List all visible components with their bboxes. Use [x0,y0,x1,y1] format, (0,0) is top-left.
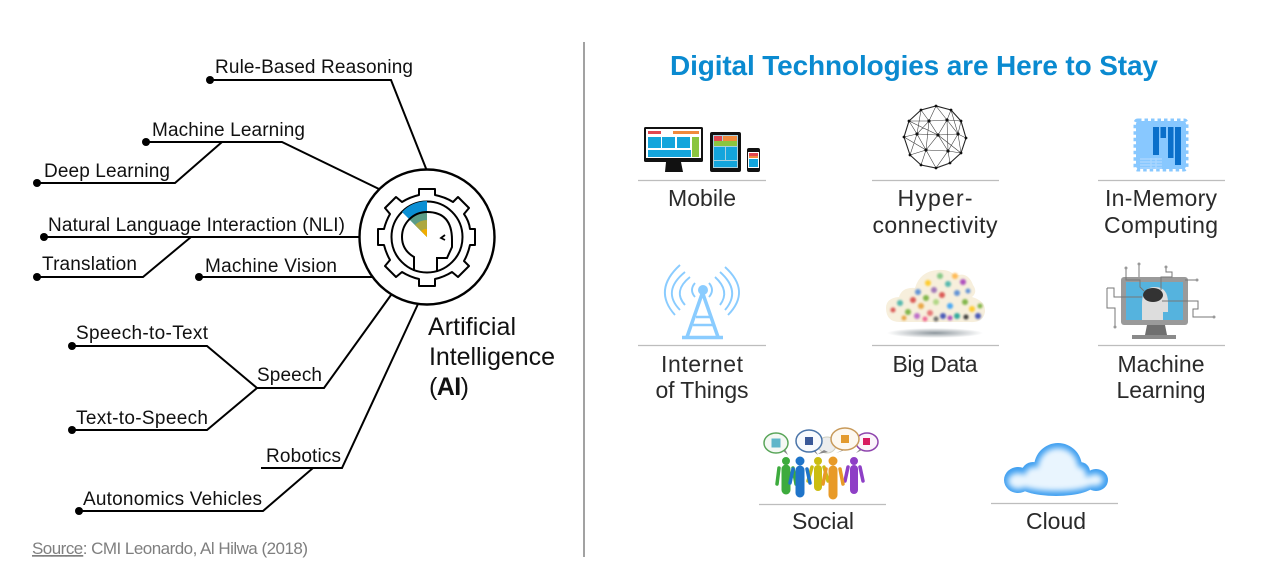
label: Translation: Translation [42,254,137,275]
item: Hyper-connectivity: connectivity [872,212,998,238]
label: Text-to-Speech [68,388,257,434]
item: Cloud [991,443,1118,534]
label: Artificial Intelligence (AI) [428,313,555,401]
label: Speech [257,295,391,388]
label: Translation [33,237,191,281]
item: Hyper-connectivity: Hyper- [898,185,972,211]
item: Machine Learning: Learning [1116,377,1206,403]
divider [583,42,585,557]
label: Rule-Based Reasoning: Rule-Based Reasoning [215,57,413,78]
item: Social [759,428,886,534]
panel: AI diagram [33,57,555,515]
item: Hyper-connectivity [872,105,999,238]
item: Big Data [872,270,999,377]
label: Artificial Intelligence (AI): Intelligence [429,343,555,371]
icon: devices [644,127,760,172]
icon: memory chip [1135,120,1187,170]
label: Rule-Based Reasoning [206,57,427,171]
item: Internet of Things: of Things [656,377,748,403]
icon: wire globe [903,105,967,169]
icon: icon cloud [886,270,985,338]
label: Speech-to-Text [68,323,257,388]
label: Deep Learning: Deep Learning [44,161,170,182]
icon: monitor with head [1107,262,1216,339]
label: Machine Vision [195,256,372,281]
source note: Source: CMI Leonardo, Al Hilwa (2018) [32,539,308,558]
label: Machine Learning [142,120,379,189]
label: Artificial Intelligence (AI): Artificial [428,313,516,341]
icon: blue cloud [1004,443,1108,496]
item: Machine Learning: Machine [1118,351,1204,377]
label: Speech-to-Text: Speech-to-Text [76,323,209,344]
label: Speech: Speech [257,365,322,386]
label: Deep Learning [33,142,222,187]
item: In-Memory Computing: Computing [1104,212,1218,238]
label: Robotics: Robotics [266,446,341,467]
item: Social: Social [792,508,854,534]
item: In-Memory Computing [1098,120,1225,238]
item: Internet of Things [638,265,766,403]
label: Natural Language Interaction: Natural Language Interaction (NLI) [48,215,345,236]
icon: people with speech bubbles [764,428,878,495]
label: Artificial Intelligence (AI): (AI) [429,373,469,401]
item: Machine Learning [1098,262,1225,403]
item: Big Data: Big Data [892,351,978,377]
item: Mobile: Mobile [668,185,736,211]
item: Internet of Things: Internet [661,351,744,377]
item: Cloud: Cloud [1026,508,1086,534]
item: Mobile [638,127,766,211]
label: Text-to-Speech: Text-to-Speech [76,408,208,429]
label: Autonomics Vehicles [75,468,313,515]
label: Autonomics Vehicles: Autonomics Vehicles [83,489,262,510]
label: Robotics [261,304,418,468]
label: Machine Vision: Machine Vision [205,256,337,277]
icon: radio tower [665,265,739,338]
title: Digital Technologies are Here to Stay [670,50,1158,81]
label: Machine Learning: Machine Learning [152,120,305,141]
icon: AI gear head [360,170,494,304]
item: In-Memory Computing: In-Memory [1105,185,1218,211]
